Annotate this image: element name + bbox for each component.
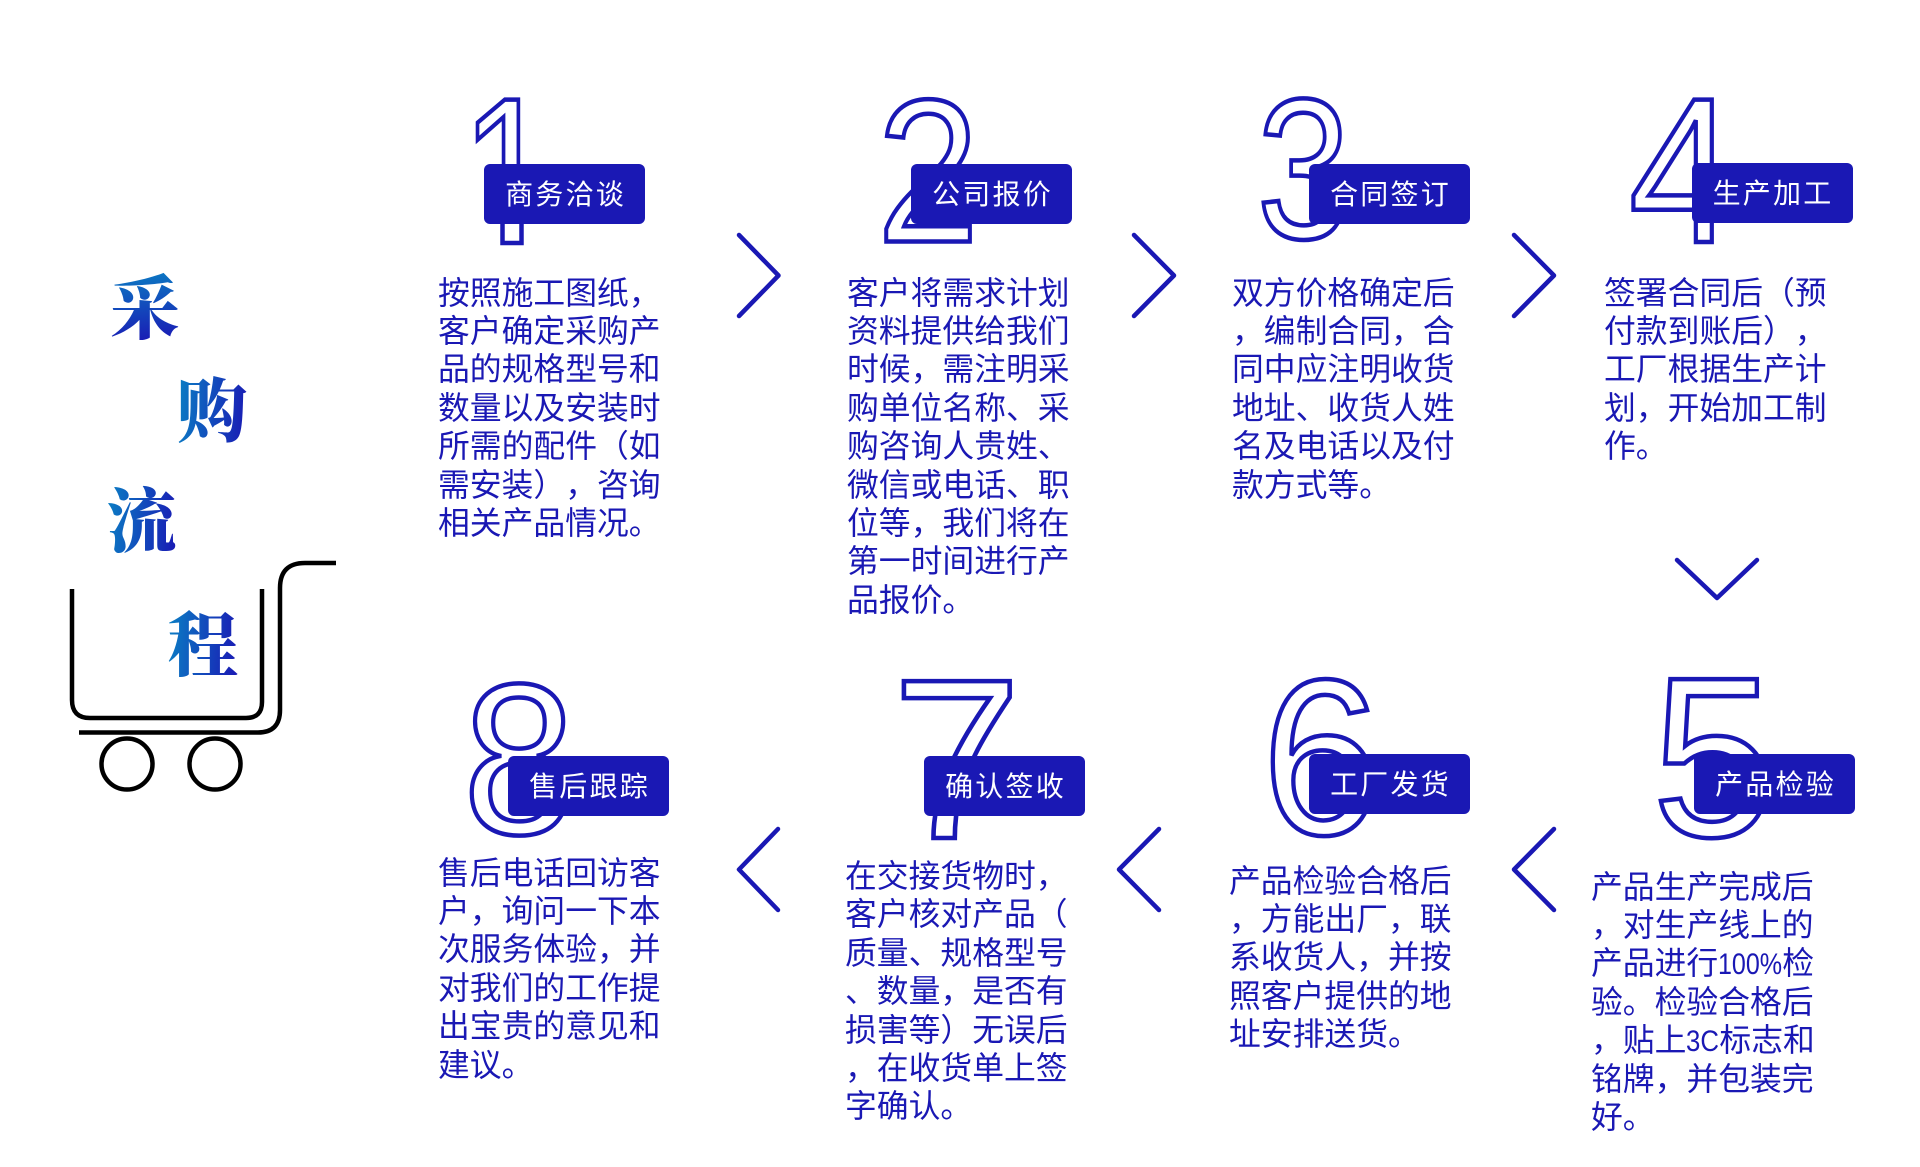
title: 程: 程 xyxy=(168,590,238,691)
text: step 1 description: 品的规格型号和 xyxy=(438,344,661,390)
text: step 2 description: 时候，需注明采 xyxy=(847,344,1070,390)
text: step 5 description: ，对生产线上的 xyxy=(1591,900,1814,946)
panel: step 7 xyxy=(845,632,1085,1127)
text: step 2 description: 第一时间进行产 xyxy=(847,536,1070,582)
text: step 5 description xyxy=(1591,862,1815,1138)
text: step 5 description: 100% xyxy=(1718,948,1782,981)
text: step 1 description: 相关产品情况。 xyxy=(438,498,661,544)
panel: step 6 xyxy=(1229,634,1470,1055)
number 1: 1 xyxy=(461,54,555,286)
title: 采: 采 xyxy=(110,253,180,354)
title: 购: 购 xyxy=(177,356,247,457)
tag: 工厂发货: 工厂发货 xyxy=(1330,763,1451,803)
text: step 3 description: 名及电话以及付 xyxy=(1232,421,1455,467)
number 7: 7 xyxy=(892,632,1021,887)
tag: 售后跟踪 xyxy=(508,756,669,816)
panel: title and cart xyxy=(70,253,336,792)
text: step 2 description: 客户将需求计划 xyxy=(847,268,1070,314)
icon: shopping cart xyxy=(70,560,336,792)
text: step 4 description: 付款到账后）， xyxy=(1604,306,1827,352)
number 1 xyxy=(476,97,524,246)
number 5: 5 xyxy=(1652,630,1775,885)
tag: 商务洽谈: 商务洽谈 xyxy=(505,173,626,213)
text: step 4 description: 作。 xyxy=(1604,421,1668,467)
text: step 3 description: 同中应注明收货 xyxy=(1232,344,1455,390)
text: step 2 description: 微信或电话、职 xyxy=(847,460,1070,506)
tag: 工厂发货 xyxy=(1309,754,1470,814)
text: step 8 description: 对我们的工作提 xyxy=(438,963,661,1009)
tag: 商务洽谈 xyxy=(484,164,645,224)
text: step 8 description: 出宝贵的意见和 xyxy=(438,1001,661,1047)
text: step 1 description: 数量以及安装时 xyxy=(438,383,661,429)
text: step 4 description: 划，开始加工制 xyxy=(1604,383,1827,429)
panel: step 8 xyxy=(438,640,669,1086)
text: step 7 description: 损害等）无误后 xyxy=(845,1005,1068,1051)
tag: 公司报价: 公司报价 xyxy=(932,173,1053,213)
text: step 7 description: 字确认。 xyxy=(845,1081,972,1127)
tag: 产品检验 xyxy=(1694,754,1855,814)
panel: step 4 xyxy=(1604,56,1853,467)
number 4: 4 xyxy=(1629,56,1736,287)
text: step 3 description xyxy=(1232,268,1455,506)
panel: step 3 xyxy=(1232,58,1470,506)
text: step 3 description: 款方式等。 xyxy=(1232,460,1391,506)
text: step 4 description xyxy=(1604,268,1827,467)
text: step 7 description xyxy=(845,851,1068,1127)
tag: 生产加工 xyxy=(1692,163,1852,223)
text: step 6 description xyxy=(1229,856,1452,1055)
text: step 2 description: 资料提供给我们 xyxy=(847,306,1070,352)
text: step 8 description: 户，询问一下本 xyxy=(438,886,661,932)
text: step 7 description: 质量、规格型号 xyxy=(845,928,1068,974)
text: step 1 description xyxy=(438,268,661,544)
number 6: 6 xyxy=(1262,634,1381,882)
tag: 确认签收: 确认签收 xyxy=(945,765,1066,805)
text: step 1 description: 客户确定采购产 xyxy=(438,306,661,352)
text: step 1 description: 按照施工图纸， xyxy=(438,268,661,314)
text: step 2 description xyxy=(847,268,1070,621)
number 2: 2 xyxy=(877,58,979,286)
panel: step 1 xyxy=(438,97,661,544)
number 3: 3 xyxy=(1257,58,1350,281)
text: step 3 description: 双方价格确定后 xyxy=(1232,268,1455,314)
text: step 1 description: 需安装），咨询 xyxy=(438,460,661,506)
text: step 5 description: 铭牌，并包装完 xyxy=(1591,1054,1814,1100)
tag: 确认签收 xyxy=(924,756,1085,816)
text: step 5 description: 3C xyxy=(1686,1025,1719,1058)
text: step 6 description: 照客户提供的地 xyxy=(1229,971,1452,1017)
text: step 8 description: 售后电话回访客 xyxy=(438,848,661,894)
text: step 5 description: 产品进行 检 xyxy=(1591,938,1814,984)
text: step 4 description: 工厂根据生产计 xyxy=(1604,344,1827,390)
text: step 7 description: 、数量，是否有 xyxy=(845,966,1068,1012)
text: step 4 description: 签署合同后（预 xyxy=(1604,268,1827,314)
text: step 6 description: 址安排送货。 xyxy=(1229,1009,1420,1055)
number 8: 8 xyxy=(463,640,575,880)
tag: 产品检验: 产品检验 xyxy=(1715,763,1836,803)
tag: 公司报价 xyxy=(911,164,1072,224)
tag: 合同签订: 合同签订 xyxy=(1330,173,1451,213)
text: step 7 description: 客户核对产品（ xyxy=(845,889,1068,935)
tag: 合同签订 xyxy=(1309,164,1470,224)
text: step 5 description: 产品生产完成后 xyxy=(1591,862,1814,908)
title: 流: 流 xyxy=(106,466,176,567)
tag: 售后跟踪: 售后跟踪 xyxy=(529,765,650,805)
text: step 5 description: 验。检验合格后 xyxy=(1591,977,1814,1023)
text: step 5 description: ，贴上 标志和 xyxy=(1591,1015,1815,1061)
text: step 3 description: 地址、收货人姓 xyxy=(1232,383,1455,429)
text: step 1 description: 所需的配件（如 xyxy=(438,421,661,467)
panel: step 5 xyxy=(1591,630,1855,1138)
text: step 8 description: 次服务体验，并 xyxy=(438,924,661,970)
panel: step 2 xyxy=(847,58,1072,621)
text: step 2 description: 购咨询人贵姓、 xyxy=(847,421,1070,467)
text: step 5 description: 好。 xyxy=(1591,1092,1655,1138)
text: step 2 description: 品报价。 xyxy=(847,575,974,621)
text: step 2 description: 购单位名称、采 xyxy=(847,383,1070,429)
text: step 6 description: ，方能出厂，联 xyxy=(1229,894,1452,940)
text: step 2 description: 位等，我们将在 xyxy=(847,498,1070,544)
text: step 6 description: 系收货人，并按 xyxy=(1229,932,1452,978)
text: step 6 description: 产品检验合格后 xyxy=(1229,856,1452,902)
tag: 生产加工: 生产加工 xyxy=(1713,172,1833,212)
text: step 7 description: ，在收货单上签 xyxy=(845,1043,1068,1089)
text: step 8 description: 建议。 xyxy=(438,1040,533,1086)
text: step 8 description xyxy=(438,848,661,1086)
text: step 7 description: 在交接货物时， xyxy=(845,851,1068,897)
text: step 3 description: ，编制合同，合 xyxy=(1232,306,1455,352)
